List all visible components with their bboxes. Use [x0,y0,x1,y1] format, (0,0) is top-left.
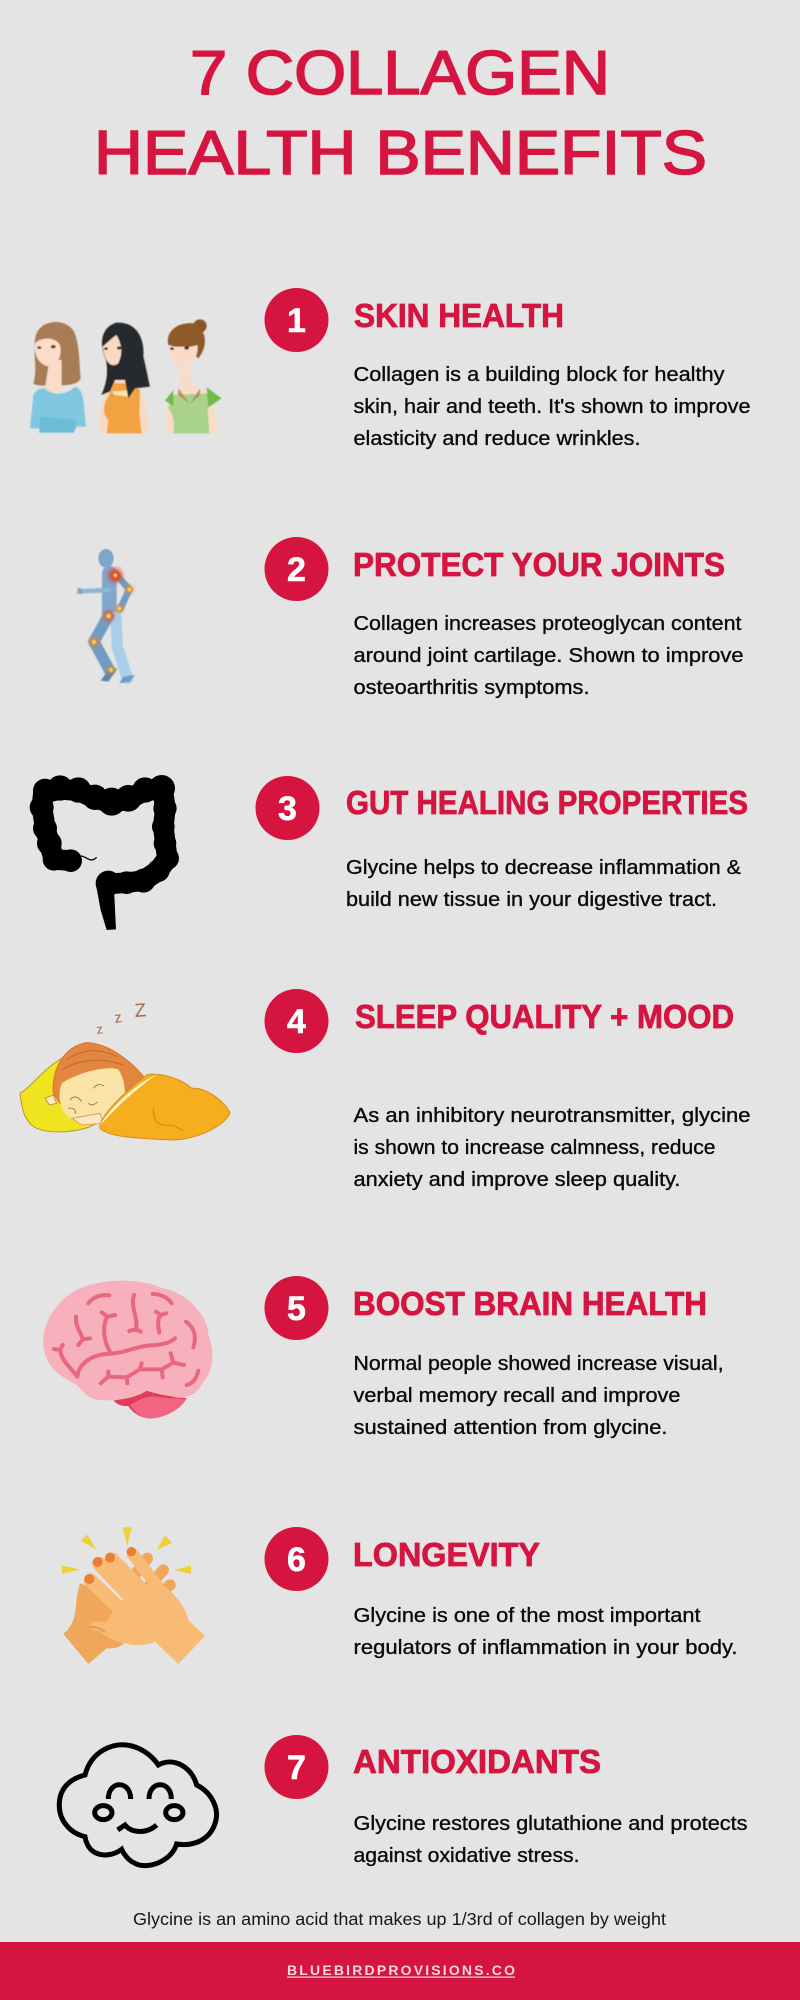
number badge 7: 7 [287,1749,306,1787]
number badge 3: 3 [278,790,297,828]
icon: sleeping girl [20,1043,230,1140]
body text: sustained attention from glycine. [354,1417,668,1439]
number badge 6: 6 [287,1541,306,1579]
panel: gut healing properties [30,775,748,930]
body text [346,857,742,911]
number badge 3 [256,776,320,840]
number badge 5: 5 [287,1290,306,1328]
panel: antioxidants [59,1735,748,1867]
panel: boost brain health [43,1276,723,1439]
icon: brain [43,1281,212,1418]
body text: Collagen increases proteoglycan content [354,613,742,635]
heading: ANTIOXIDANTS [353,1743,601,1780]
body text: Normal people showed increase visual, [354,1353,724,1375]
icon: runner with glowing joints [77,549,135,683]
body text: Collagen is a building block for healthy [354,364,724,386]
heading: LONGEVITY [353,1536,540,1573]
footnote: Glycine is an amino acid that makes up 1/3rd of collagen by weight [133,1909,666,1929]
title [94,39,707,188]
body text: regulators of inflammation in your body. [354,1637,738,1659]
panel: skin health [30,288,750,450]
body text: Glycine helps to decrease inflammation & [346,857,742,879]
body text [354,613,744,699]
body text [354,364,750,450]
icon: colon silhouette [30,775,179,930]
body text: build new tissue in your digestive tract. [346,889,717,911]
body text [354,1605,738,1659]
panel: longevity [62,1527,738,1664]
number badge 2: 2 [287,551,306,589]
heading: SLEEP QUALITY + MOOD [355,998,734,1035]
heading: PROTECT YOUR JOINTS [353,546,725,583]
icon: smiling cloud [59,1745,217,1866]
body text: Glycine is one of the most important [354,1605,701,1627]
body text: around joint cartilage. Shown to improve [354,645,744,667]
icon: clapping hands [62,1527,205,1664]
heading: BOOST BRAIN HEALTH [353,1285,707,1322]
number badge 1: 1 [287,302,306,340]
number badge 7 [264,1735,328,1799]
number badge 1 [264,288,328,352]
icon: sleep z letters: z [95,1021,104,1037]
icon: sleep z letters: z [113,1009,123,1027]
icon: three women [30,319,222,433]
heading: GUT HEALING PROPERTIES [346,784,748,821]
icon: sleep z letters: Z [134,1000,147,1022]
body text: is shown to increase calmness, reduce [354,1137,716,1159]
body text: As an inhibitory neurotransmitter, glycine [354,1105,750,1127]
footer link: BLUEBIRDPROVISIONS.CO [287,1962,515,1978]
body text: skin, hair and teeth. It's shown to improve [354,396,750,418]
footer bar [0,1942,800,2000]
number badge 6 [264,1527,328,1591]
body text [354,1105,750,1191]
body text [354,1813,748,1867]
body text: elasticity and reduce wrinkles. [354,428,640,450]
title: HEALTH BENEFITS [94,119,707,188]
body text: Glycine restores glutathione and protects [354,1813,748,1835]
heading: SKIN HEALTH [354,297,564,334]
number badge 4 [264,989,328,1053]
panel: sleep quality and mood [20,989,750,1191]
title: 7 COLLAGEN [190,39,610,108]
number badge 2 [264,537,328,601]
icon: sleep z letters [95,1000,147,1037]
body text [354,1353,724,1439]
body text: verbal memory recall and improve [354,1385,680,1407]
number badge 5 [264,1276,328,1340]
body text: osteoarthritis symptoms. [354,677,590,699]
panel: protect your joints [77,537,743,699]
body text: against oxidative stress. [354,1845,580,1867]
body text: anxiety and improve sleep quality. [354,1169,680,1191]
number badge 4: 4 [287,1003,306,1041]
